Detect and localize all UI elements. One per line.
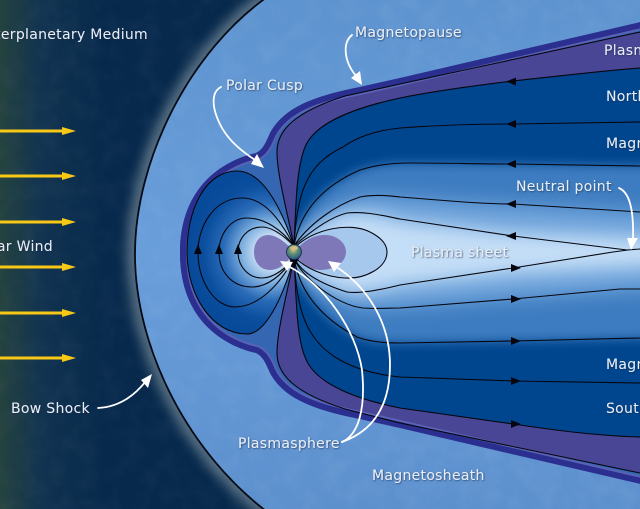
plasmasphere — [254, 235, 346, 270]
earth — [286, 244, 302, 260]
plasma mantle north — [277, 32, 640, 246]
dayside field lobe — [187, 171, 294, 334]
label: plasmasphere: Plasmasphere — [238, 436, 340, 452]
plasma mantle south — [277, 258, 640, 473]
label: neutral point: Neutral point — [516, 179, 612, 195]
callout arrows — [98, 35, 633, 442]
label: polar cusp: Polar Cusp — [226, 78, 303, 94]
label: bow shock: Bow Shock — [11, 401, 90, 417]
magnetosheath and bow shock line — [135, 0, 640, 509]
field direction arrowheads — [194, 78, 521, 428]
magnetopause bands — [180, 21, 640, 485]
solar wind arrows — [0, 127, 76, 362]
label: magnetosheath: Magnetosheath — [372, 468, 485, 484]
label: plasma sheet: Plasma sheet — [411, 245, 509, 261]
bow shock glow — [135, 0, 270, 509]
magnetosphere body — [180, 22, 640, 484]
closed field lobe — [294, 227, 387, 278]
label: magnetopause: Magnetopause — [355, 25, 462, 41]
magnetotail gradient — [280, 60, 640, 450]
magnetic field lines — [187, 32, 640, 473]
